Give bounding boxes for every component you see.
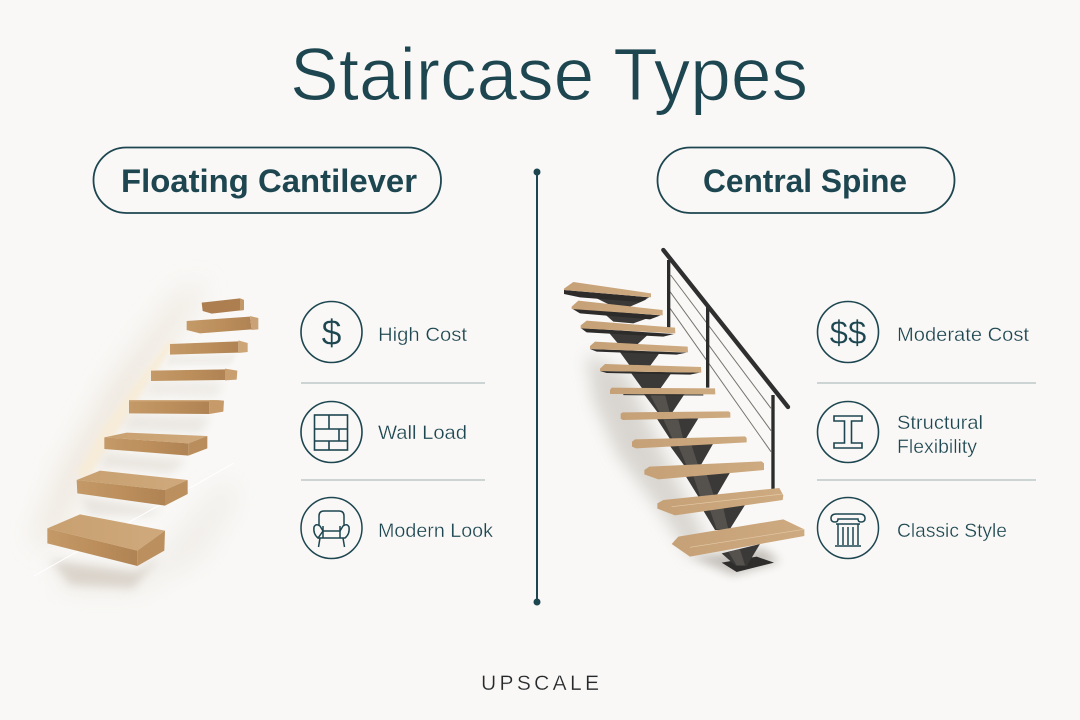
left heading pill [94,148,441,213]
central divider [534,168,540,606]
icon: i-beam [818,402,878,462]
icon: dollar [301,302,362,362]
feature row: high cost: High Cost [378,325,468,346]
tread 10 [657,488,783,515]
handrail [663,250,788,407]
feature row: modern look [301,498,494,558]
tread 8 [47,514,165,566]
brand logo: UPSCALE [481,672,599,695]
feature row: wall load: Wall Load [378,423,467,444]
illustration: central spine stairs [564,250,804,575]
icon: dollar: $ [321,312,342,353]
tread 8 [632,436,747,448]
feature row: classic style [818,498,1007,558]
wall glow and shadows [33,283,237,590]
tread 7 [621,411,730,420]
left row separators [301,383,485,480]
tread 1 [202,298,244,314]
icon: double dollar: $$ [830,314,866,351]
title: Staircase Types [290,33,808,116]
feature row: wall load [301,402,467,462]
icon: double dollar [818,302,878,362]
feature row: structural flexibility: Structural [897,413,983,434]
tread 2 [572,301,663,319]
soft shadows [587,353,780,575]
feature row: classic style: Classic Style [897,521,1007,542]
tread 9 [644,461,764,479]
illustration: floating cantilever stairs [33,283,258,590]
tread 2 [187,316,258,333]
feature row: moderate cost: Moderate Cost [897,325,1030,346]
left heading pill: Floating Cantilever [121,163,417,199]
central steel spine [590,295,760,566]
icon: armchair [301,498,362,558]
tread 5 [129,400,224,414]
base plate [722,557,774,572]
tread 4 [590,342,688,355]
feature row: high cost [301,302,468,362]
tread 3 [581,321,675,337]
feature row: structural flexibility: Flexibility [897,437,978,458]
tread 4 [151,369,237,381]
feature row: moderate cost [818,302,1030,362]
tread 3 [170,340,248,355]
tread 6 [104,433,207,456]
tread 1 [564,282,651,302]
cable railing [670,275,771,452]
icon: brick wall [301,402,362,462]
right row separators [817,383,1036,480]
tread 11 [672,519,804,557]
tread 7 [77,471,188,506]
spine highlights [650,395,745,565]
right heading pill: Central Spine [703,163,907,199]
feature row: modern look: Modern Look [378,521,494,542]
tread 6 [610,388,715,395]
icon: ionic column [818,498,878,558]
tread 5 [600,364,701,375]
right heading pill [658,148,954,213]
feature row: structural flexibility [818,402,983,462]
railing posts [669,260,773,492]
